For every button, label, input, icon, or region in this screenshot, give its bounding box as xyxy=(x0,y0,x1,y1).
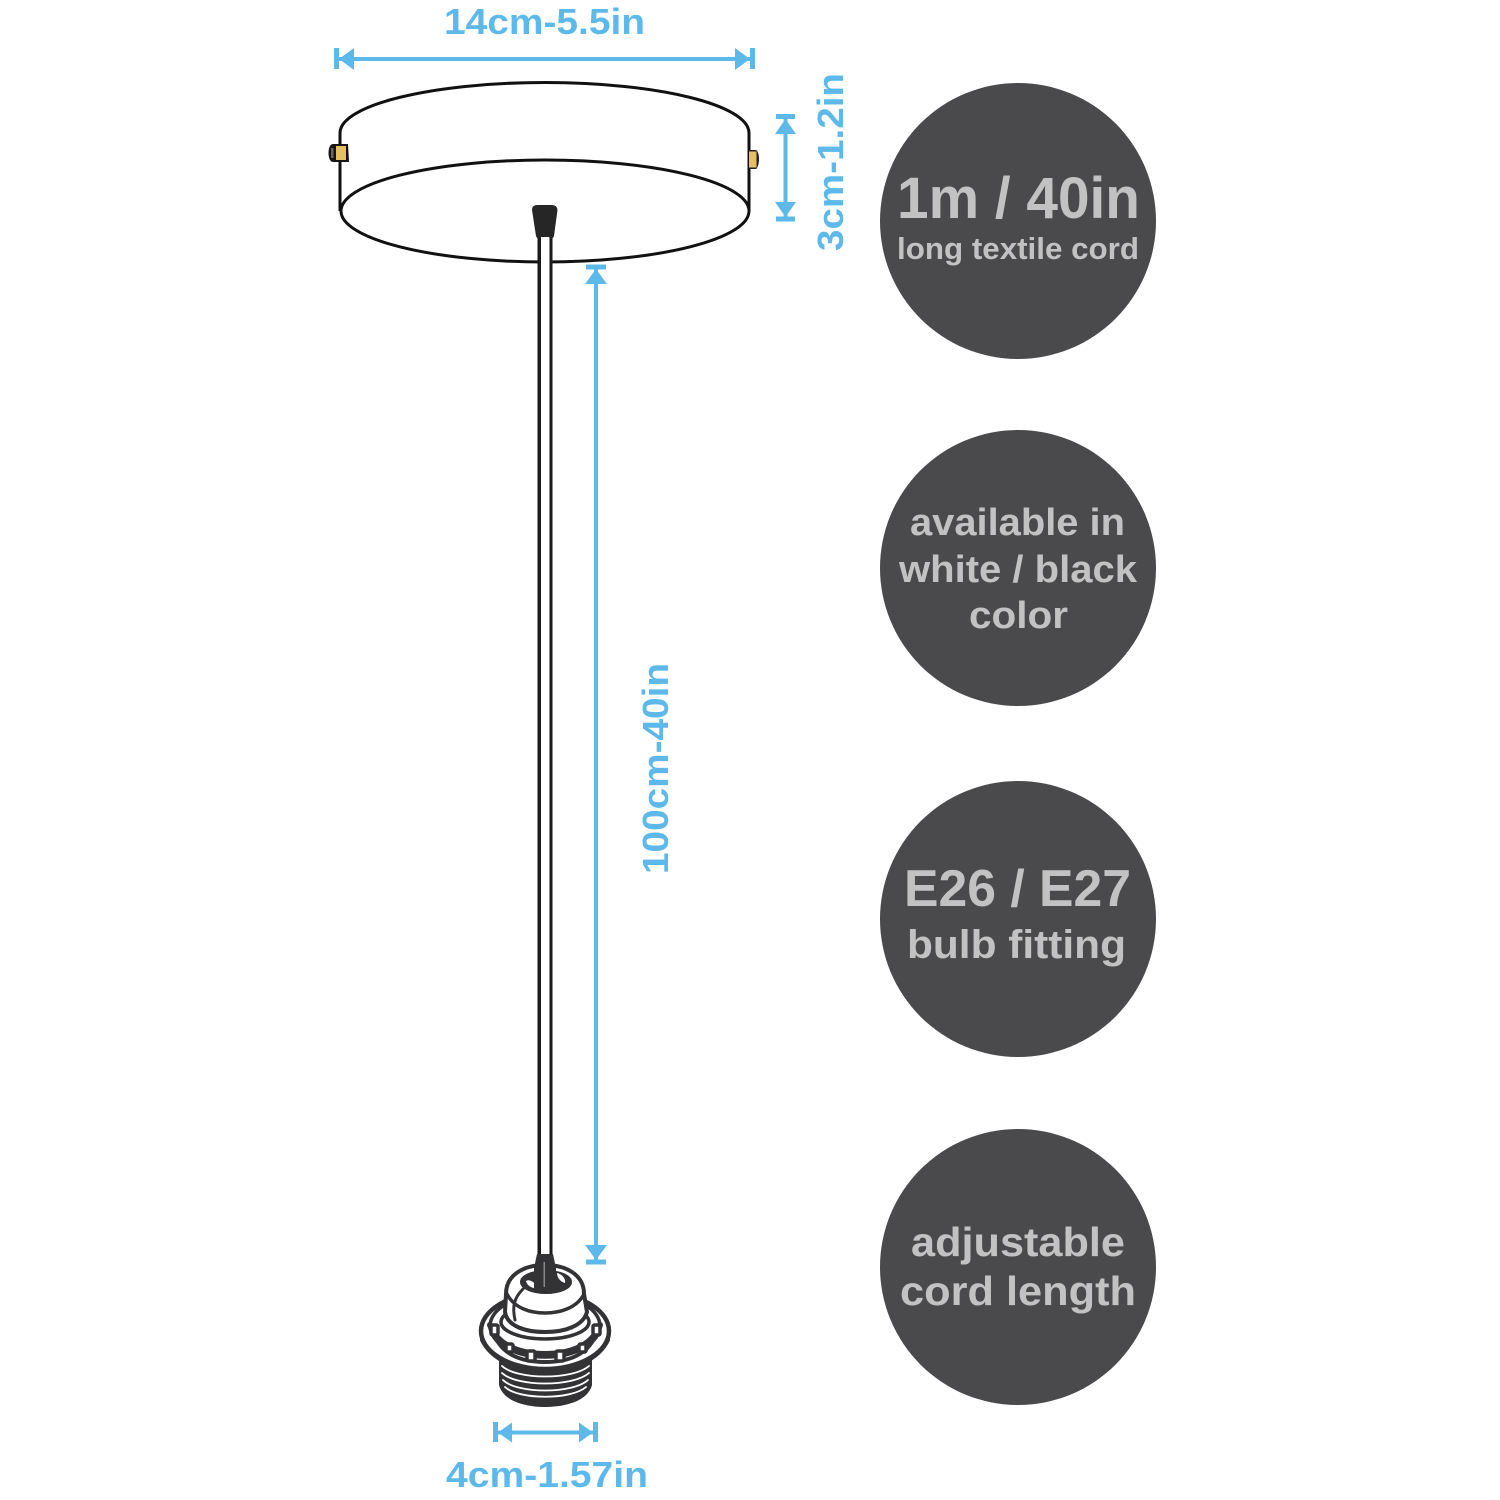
dimension arrow: socket width xyxy=(493,1422,598,1442)
dimension label: canopy height: 3cm-1.2in xyxy=(810,73,851,251)
lamp holder socket xyxy=(481,1254,609,1407)
dimension arrow: cord length xyxy=(585,264,607,1264)
dimension label: canopy width: 14cm-5.5in xyxy=(444,1,645,42)
badge: bulb fitting: bulb fitting xyxy=(907,923,1126,967)
badge: colors: white / black xyxy=(898,549,1138,591)
ceiling canopy xyxy=(328,82,759,262)
dome xyxy=(501,1254,589,1339)
badge: colors: color xyxy=(969,595,1068,637)
flange ring xyxy=(481,1293,609,1371)
badge: colors xyxy=(880,430,1156,706)
cord grip at canopy xyxy=(532,205,558,239)
badge: adjustable: cord length xyxy=(900,1268,1136,1314)
threaded base xyxy=(499,1350,592,1407)
badge: bulb fitting: E26 / E27 xyxy=(904,860,1131,918)
badge: cord length: long textile cord xyxy=(897,231,1139,266)
badge: bulb fitting xyxy=(880,781,1156,1057)
badge: cord length xyxy=(880,83,1156,359)
badge: adjustable: adjustable xyxy=(911,1219,1125,1265)
badge: colors: available in xyxy=(910,502,1125,544)
badge: adjustable xyxy=(880,1129,1156,1405)
textile cord xyxy=(538,236,552,1258)
dimension label: cord length: 100cm-40in xyxy=(635,663,676,874)
dimension label: socket width: 4cm-1.57in xyxy=(446,1454,648,1495)
dimension arrow: canopy width xyxy=(334,48,755,70)
icon: left brass screw xyxy=(328,144,349,162)
badge: cord length: 1m / 40in xyxy=(897,166,1140,231)
dimension arrow: canopy height xyxy=(775,114,796,222)
icon: right brass screw xyxy=(749,150,759,169)
